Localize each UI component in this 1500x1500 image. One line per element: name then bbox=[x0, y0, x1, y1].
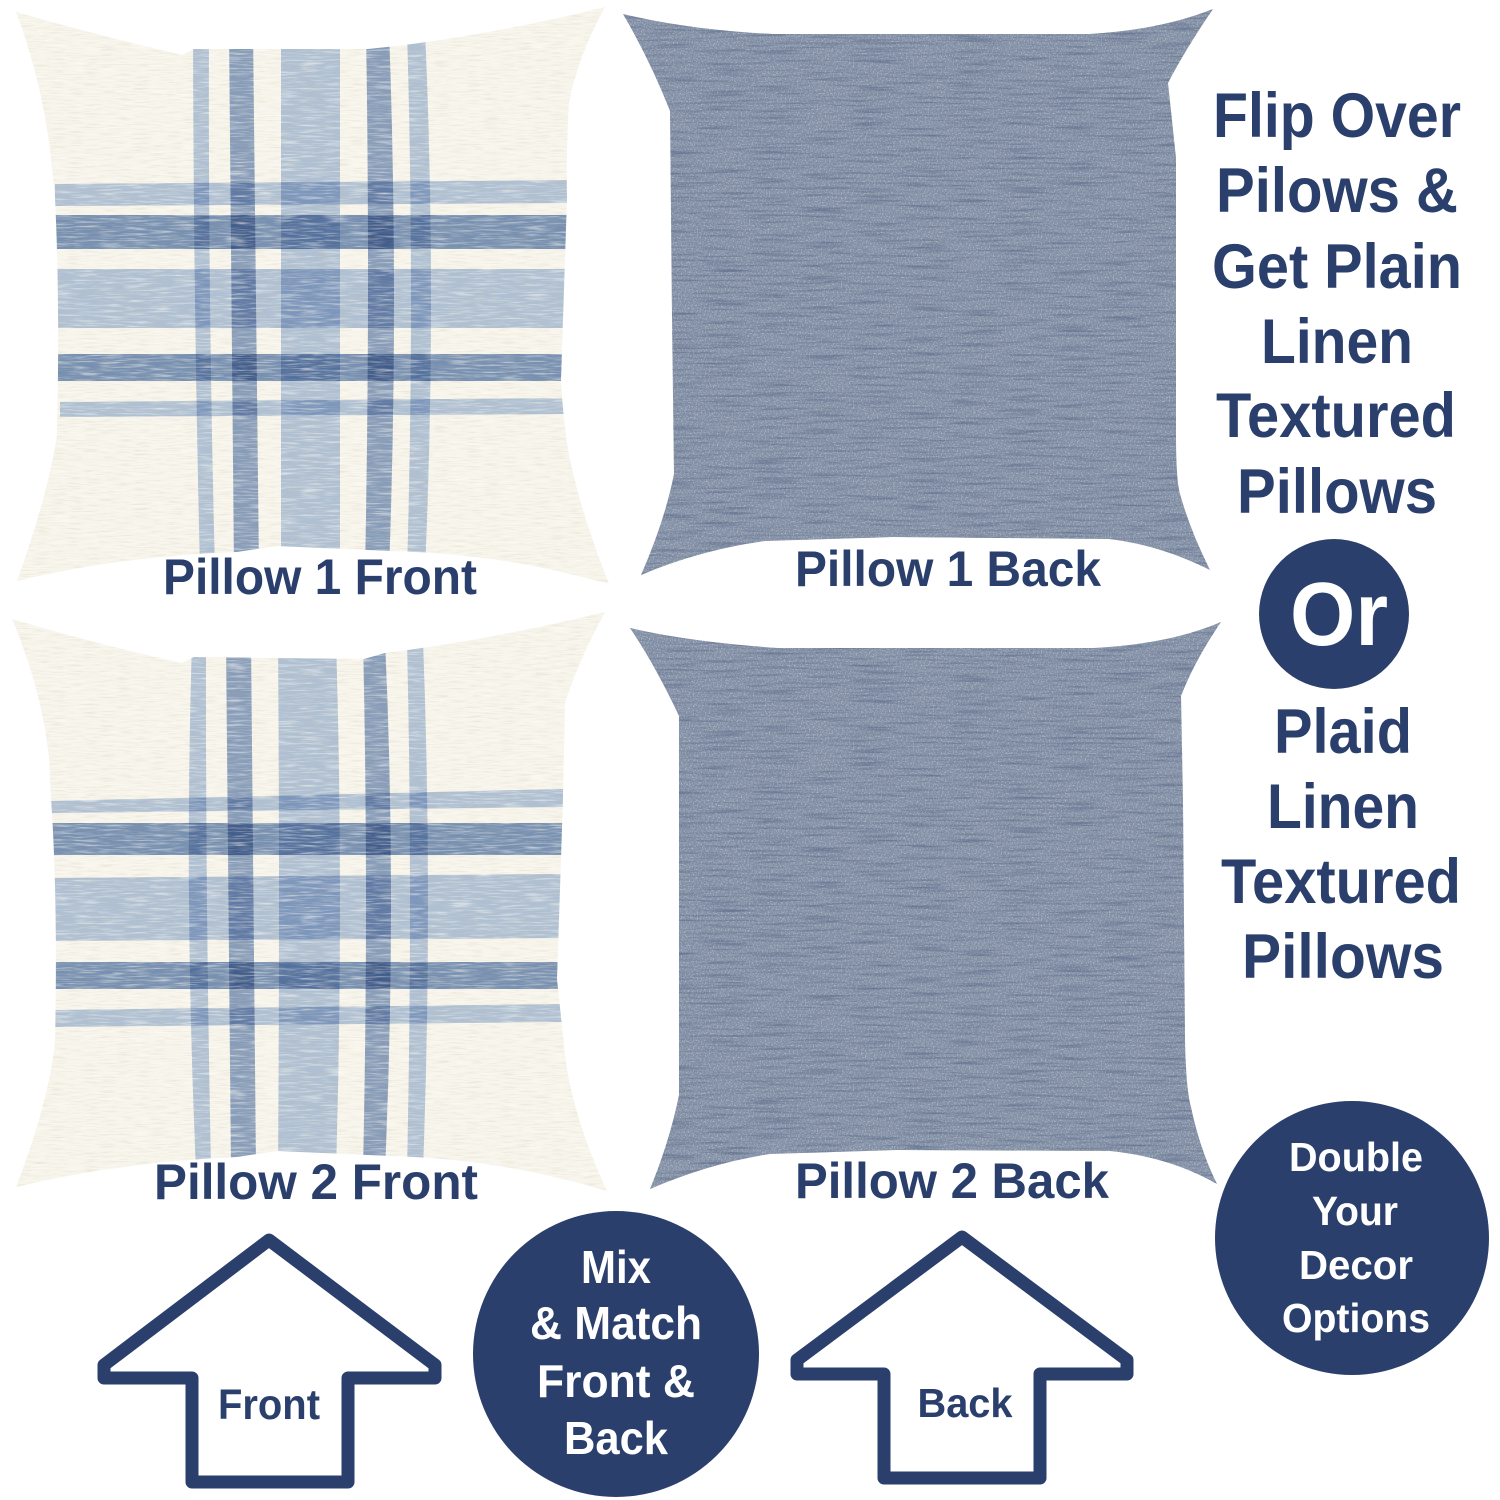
text block: plaid pillows: Linen bbox=[1267, 772, 1419, 842]
text block: plaid pillows: Textured bbox=[1221, 847, 1461, 917]
label: pillow 2 back: Pillow 2 Back bbox=[795, 1153, 1109, 1209]
badge: mix and match bbox=[473, 1211, 759, 1497]
arrow: front: Front bbox=[218, 1381, 320, 1429]
text block: plaid pillows bbox=[1221, 697, 1461, 992]
text block: plaid pillows: Plaid bbox=[1274, 697, 1412, 767]
arrow: front bbox=[104, 1240, 435, 1482]
arrow: back: Back bbox=[918, 1380, 1013, 1426]
badge: or bbox=[1259, 539, 1409, 689]
badge: double your decor options: Decor bbox=[1299, 1242, 1413, 1288]
panel: pillow 1 front bbox=[0, 0, 620, 605]
text block: flip over headline bbox=[1212, 81, 1462, 527]
text block: flip over headline: Pilows & bbox=[1216, 156, 1458, 226]
text block: flip over headline: Flip Over bbox=[1213, 81, 1461, 151]
text block: plaid pillows: Pillows bbox=[1242, 922, 1444, 992]
badge: double your decor options bbox=[1215, 1101, 1489, 1375]
label: pillow 1 front: Pillow 1 Front bbox=[163, 549, 477, 605]
label: pillow 1 back: Pillow 1 Back bbox=[795, 541, 1101, 597]
arrow: back bbox=[797, 1237, 1127, 1478]
text block: flip over headline: Pillows bbox=[1237, 457, 1437, 527]
badge: double your decor options: Your bbox=[1312, 1188, 1398, 1234]
label: pillow 2 front: Pillow 2 Front bbox=[154, 1154, 478, 1210]
panel: pillow 2 back bbox=[630, 622, 1221, 1209]
text block: flip over headline: Get Plain bbox=[1212, 232, 1462, 302]
badge: double your decor options: Options bbox=[1282, 1295, 1430, 1341]
panel: pillow 1 back bbox=[623, 9, 1213, 597]
text block: flip over headline: Textured bbox=[1216, 381, 1456, 451]
badge: mix and match: & Match bbox=[530, 1297, 702, 1349]
badge: mix and match: Front & bbox=[537, 1355, 695, 1407]
badge: mix and match: Mix bbox=[581, 1241, 651, 1293]
badge: or: Or bbox=[1290, 565, 1388, 665]
panel: pillow 2 front bbox=[0, 600, 620, 1210]
badge: double your decor options: Double bbox=[1289, 1134, 1423, 1180]
text block: flip over headline: Linen bbox=[1261, 307, 1413, 377]
badge: mix and match: Back bbox=[564, 1412, 668, 1464]
